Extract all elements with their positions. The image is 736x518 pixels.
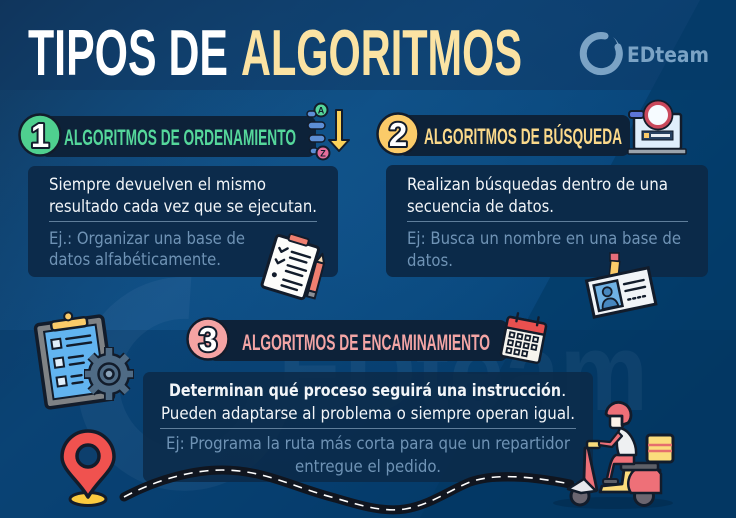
- title: [28, 16, 522, 89]
- text box: encaminamiento: entregue el pedido.: [295, 457, 441, 477]
- heading: algoritmos de ordenamiento: ALGORITMOS DE ORDENAMIENTO: [64, 125, 296, 150]
- icon: clipboard with gear: [34, 308, 134, 408]
- icon: laptop with magnifier: [628, 100, 686, 154]
- heading: algoritmos de búsqueda: [378, 114, 630, 156]
- panel: algoritmos de búsqueda: [378, 100, 708, 317]
- logo: EDteam: [583, 36, 709, 73]
- wheels: [571, 487, 589, 505]
- icon: id card: [587, 253, 656, 317]
- icon: sorted list A to Z: A: [318, 106, 325, 116]
- text box: búsqueda: secuencia de datos.: [407, 197, 554, 217]
- text box: búsqueda: Ej: Busca un nombre en una base de: [407, 229, 681, 249]
- heading: algoritmos de búsqueda: ALGORITMOS DE BÚSQUEDA: [424, 124, 622, 149]
- road with dashed centre line: [124, 470, 570, 510]
- icon: checklist and pencil: [261, 230, 326, 299]
- logo: EDteam: EDteam: [627, 43, 709, 67]
- heading: algoritmos de encaminamiento: [188, 318, 508, 361]
- heading: algoritmos de ordenamiento: [20, 114, 316, 157]
- text box: ordenamiento: Ej.: Organizar una base de: [49, 229, 245, 249]
- text box: búsqueda: datos.: [407, 251, 453, 271]
- icon: sorted list A to Z: [307, 104, 349, 160]
- text box: búsqueda: Realizan búsquedas dentro de una: [407, 175, 668, 195]
- heading: algoritmos de encaminamiento: ALGORITMOS DE ENCAMINAMIENTO: [242, 330, 490, 355]
- heading: algoritmos de ordenamiento: 1: [31, 117, 49, 154]
- text box: ordenamiento: datos alfabéticamente.: [49, 250, 221, 270]
- title: TIPOS DE: [28, 16, 228, 89]
- watermark logo: EDteam: [278, 311, 648, 434]
- text box: ordenamiento: [28, 166, 338, 277]
- text box: ordenamiento: resultado cada vez que se ejecutan.: [49, 197, 317, 217]
- heading: algoritmos de búsqueda: 2: [389, 116, 407, 153]
- text box: encaminamiento: Ej: Programa la ruta más corta para que un repartidor: [166, 434, 570, 454]
- text box: encaminamiento: [143, 372, 593, 482]
- watermark logo: [98, 298, 648, 470]
- icon: calendar: [501, 312, 547, 363]
- text box: encaminamiento: Determinan qué proceso seguirá una instrucción: [169, 381, 561, 401]
- icon: delivery scooter: [553, 402, 673, 509]
- text box: encaminamiento: Pueden adaptarse al problema o siempre operan igual.: [161, 404, 575, 424]
- heading: algoritmos de encaminamiento: 3: [199, 321, 217, 358]
- text box: encaminamiento: .: [561, 381, 566, 401]
- text box: búsqueda: [386, 165, 708, 277]
- text box: ordenamiento: Siempre devuelven el mismo: [49, 175, 266, 195]
- title: ALGORITMOS: [241, 16, 522, 89]
- box: [647, 435, 673, 462]
- scooter body: [600, 470, 660, 492]
- icon: location pin: [62, 431, 114, 506]
- icon: sorted list A to Z: Z: [320, 148, 326, 158]
- rider: [606, 455, 634, 482]
- panel: algoritmos de encaminamiento: [34, 308, 673, 510]
- panel: algoritmos de ordenamiento: [20, 104, 349, 299]
